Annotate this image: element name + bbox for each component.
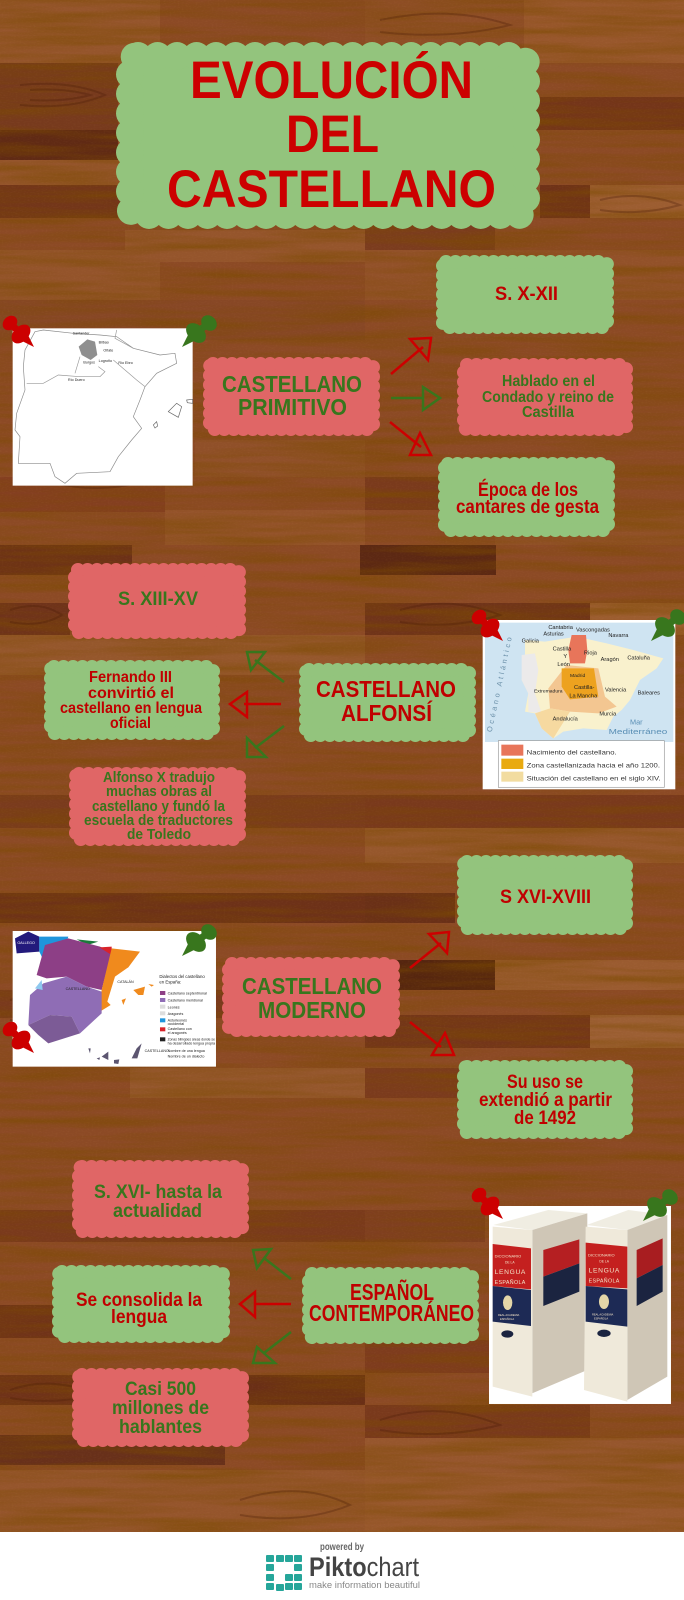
box: castellano alfonsí: ALFONSÍ [341,699,433,726]
box: fernando [51,667,213,733]
box: se consolida: lengua [111,1307,167,1328]
pushpin: green map 2 [651,606,684,641]
map 2: Castilian expansion: Nacimiento del castellano. [527,750,617,756]
box: castellano alfonsí: CASTELLANO [316,676,456,702]
map 2: Castilian expansion: Aragón [601,657,619,663]
pushpin: red map 1 [0,313,34,347]
map 2: Castilian expansion: Extremadura [534,688,563,694]
map 3: dialects: Dialectos del castellano [159,974,205,979]
logo mark [266,1555,302,1591]
map 3: dialects: Nombre de un dialecto [168,1054,204,1058]
wordmark: Piktochart [309,1552,419,1582]
map 2: Castilian expansion: Mar [630,718,643,727]
box: S. X-XII: S. X-XII [495,284,558,305]
book 2: ESPAÑOLA [589,1278,620,1285]
box: alfonso X: castellano y fundó la [92,798,226,815]
box: fernando: castellano en lengua [60,700,202,717]
arrow: red up right [410,932,449,968]
box: español contemporáneo: CONTEMPORÁNEO [309,1299,474,1326]
map 2: Castilian expansion: Cantabria [548,625,574,631]
map 3: dialects [13,931,216,1067]
map 3: dialects: Zonas bilingües áreas donde se [168,1038,215,1042]
map 3: dialects: Leonés [168,1006,180,1010]
box: fernando: oficial [110,715,151,732]
map 2: Castilian expansion: León [557,662,570,668]
arrow: red up right [391,338,431,374]
map 2: Castilian expansion: Castilla [553,646,572,652]
box: se consolida [59,1272,223,1336]
map 3: dialects: GALLEGO [17,941,35,945]
map 1: Castilian origin [13,328,193,486]
box: su uso: de 1492 [514,1108,576,1129]
pushpin: green books [643,1186,681,1221]
map 3: dialects: Asturleonés [168,1019,187,1023]
box: alfonso X: escuela de traductores [84,812,233,829]
map 1: Castilian origin: Río Ebro [118,361,133,365]
box: fernando: Fernando III [89,669,172,686]
map 2: Castilian expansion: Murcia [599,711,617,717]
book 1: DICCIONARIO [495,1253,521,1258]
map 2: Castilian expansion: Andalucía [553,716,579,722]
box: casi 500: hablantes [119,1417,202,1438]
box: época [445,464,608,530]
book 2: ESPAÑOLA [594,1315,608,1320]
arrow: red left [240,1292,291,1317]
box: casi 500: millones de [112,1398,209,1419]
box: S. X-XII [443,262,607,327]
map 2: Castilian expansion: Zona castellanizada hacia el año 1200. [527,764,660,770]
map 3: dialects: en España: [159,979,181,984]
arrow: green down left [247,726,284,757]
box: su uso: Su uso se [507,1072,583,1093]
dictionary books photo [489,1206,671,1404]
book 2: DICCIONARIO [588,1253,615,1258]
box: S. XVI hasta la actualidad: S. XVI- hasta la [94,1182,222,1203]
powered by: powered by [320,1542,364,1553]
footer band [0,1532,684,1600]
box: hablado: Hablado en el [502,373,595,390]
box: alfonso X: Alfonso X tradujo [103,769,215,786]
box: se consolida: Se consolida la [76,1290,202,1311]
title text: CASTELLANO [167,160,496,219]
box: alfonso X: de Toledo [127,826,191,843]
title text: EVOLUCIÓN [190,50,473,110]
box: época: cantares de gesta [456,497,599,518]
box: S. XVI hasta la actualidad: actualidad [113,1201,202,1222]
map 3: dialects: Castellano septentrional [168,992,207,996]
pushpin: red map 3 [0,1019,34,1053]
book 1: LENGUA [495,1269,526,1276]
map 3: dialects: CASTELLANO [145,1049,169,1053]
map 2: Castilian expansion [483,620,675,789]
map 2: Castilian expansion: Castilla- [574,685,595,691]
map 3: dialects: Castellano con [168,1027,192,1031]
map 3: dialects: Aragonés [168,1012,183,1016]
map 2: Castilian expansion: Océano Atlántico [485,636,514,733]
box: alfonso X [76,769,239,843]
box: hablado: Castilla [522,404,574,421]
arrow: green right [391,387,440,410]
box: castellano primitivo [210,364,373,429]
book 2: REAL ACADEMIA [592,1312,614,1316]
box: su uso: extendió a partir [479,1090,613,1111]
map 2: Castilian expansion: Navarra [608,633,629,639]
map 2: Castilian expansion: Y [563,654,567,660]
book 1: ESPAÑOLA [500,1316,514,1321]
map 2: Castilian expansion: Rioja [584,651,598,657]
map 2: Castilian expansion: Situación del castellano en el siglo XIV. [527,777,661,783]
box: S. XIII-XV [75,570,239,632]
map 1: Castilian origin: Río Duero [68,378,85,382]
box: castellano moderno: MODERNO [258,997,366,1023]
box: fernando: convirtió el [88,685,174,702]
map 3: dialects: Castellano meridional [168,998,203,1002]
tagline: make information beautiful [309,1580,420,1590]
box: hablado: Condado y reino de [482,389,614,406]
box: casi 500 [79,1375,242,1440]
map 3: dialects: ha desarrollado lengua propia [168,1042,216,1046]
box: S. XIII-XV: S. XIII-XV [118,589,198,610]
pushpin: green map 1 [182,312,220,347]
map 3: dialects: Nombre de una lengua [168,1049,206,1053]
map 3: dialects: CATALÁN [117,980,134,984]
pushpin: green map 3 [182,921,220,956]
box: castellano moderno: CASTELLANO [242,973,382,999]
map 2: Castilian expansion: Cataluña [627,655,651,661]
title panel [130,50,526,219]
map 3: dialects: occidental [168,1022,184,1026]
arrow: red down right [410,1022,454,1055]
map 2: Castilian expansion: Asturias [543,631,564,637]
box: castellano moderno [229,964,393,1030]
map 3: dialects: el aragonés [168,1031,187,1035]
arrow: red down right [390,422,431,455]
box: S XVI-XVIII [464,862,626,928]
map 2: Castilian expansion: La Mancha [569,694,598,700]
map 2: Castilian expansion: Vascongadas [576,627,610,633]
map 1: Castilian origin: Oñate [103,349,113,353]
title text: DEL [286,105,379,164]
map 3: dialects: CASTELLANO [66,987,90,991]
map 2: Castilian expansion: Valencia [605,687,627,693]
box: español contemporáneo: ESPAÑOL [350,1278,434,1305]
arrow: red left [230,692,281,717]
book 1: REAL ACADEMIA [498,1313,520,1317]
box: S. XVI hasta la actualidad [79,1167,242,1231]
map 1: Castilian origin: Logroño [99,359,112,363]
book 1: DE LA [505,1260,515,1264]
arrow: green down left [253,1332,291,1363]
box: castellano primitivo: PRIMITIVO [238,394,347,420]
box: castellano primitivo: CASTELLANO [222,371,362,397]
box: casi 500: Casi 500 [125,1379,196,1400]
book 1: ESPAÑOLA [495,1279,526,1286]
box: alfonso X: muchas obras al [106,783,212,800]
pushpin: red map 2 [469,607,503,641]
box: su uso [464,1067,626,1132]
map 1: Castilian origin: Santander [73,332,90,336]
box: español contemporáneo [309,1274,474,1337]
box: castellano alfonsí [306,670,469,735]
map 2: Castilian expansion: Mediterráneo [609,727,667,736]
box: S XVI-XVIII: S XVI-XVIII [500,887,591,908]
map 2: Castilian expansion: Baleares [638,690,660,696]
arrow: green up left [253,1249,291,1279]
box: época: Época de los [478,479,578,501]
pushpin: red books [469,1185,503,1219]
map 1: Castilian origin: Burgos [83,361,95,365]
arrow: green up left [247,652,284,682]
book 1 [493,1210,587,1397]
book 2: LENGUA [589,1268,620,1275]
map 2: Castilian expansion: Galicia [522,638,540,644]
map 1: Castilian origin: Bilbao [99,340,109,344]
book 2: DE LA [599,1260,610,1264]
title text [167,50,496,219]
map 2: Castilian expansion: Madrid [570,673,585,679]
book 2 [584,1210,667,1402]
box: hablado [464,365,626,429]
